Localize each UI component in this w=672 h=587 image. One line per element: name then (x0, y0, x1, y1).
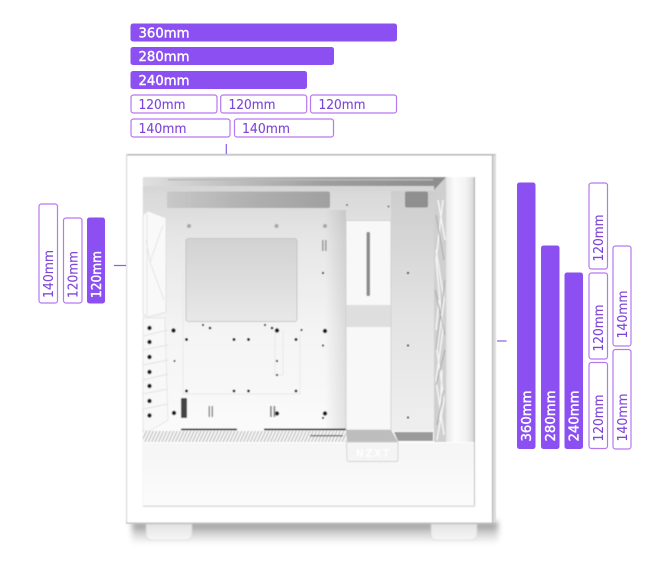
cable cover (346, 220, 391, 430)
box: 140mm fan 2: 140mm (242, 122, 290, 137)
top vent slot (167, 192, 330, 208)
box: 120mm fan 3: 120mm (318, 98, 366, 113)
box: 140mm rear fan: 140mm (42, 250, 57, 298)
case shadow (132, 522, 498, 544)
bar: 360mm radiator (130, 24, 397, 42)
bar: 280mm front radiator: 280mm (544, 390, 559, 442)
bar: 360mm front radiator: 360mm (520, 390, 535, 442)
rear fan options (39, 204, 105, 304)
box: 120mm fan 3 (310, 95, 396, 113)
mesh front intake (434, 177, 446, 442)
bar: 280mm radiator: 280mm (138, 50, 190, 65)
left fan (143, 211, 166, 317)
box: 120mm front fan middle (589, 273, 608, 359)
small top vent (405, 192, 428, 208)
pc case (126, 154, 496, 540)
box: 120mm rear fan: 120mm (66, 251, 82, 298)
top band (143, 177, 446, 191)
connector tick: right (497, 340, 506, 342)
cable slots (181, 240, 346, 430)
right bay (391, 190, 434, 431)
connector tick: left (114, 264, 126, 266)
front pillar (446, 177, 475, 442)
box: 140mm front fan top (613, 246, 631, 346)
bar: 280mm radiator (130, 47, 334, 65)
box: 120mm fan 1: 120mm (138, 98, 186, 113)
motherboard cutout (186, 238, 297, 322)
connector tick: top (225, 144, 227, 154)
right floor recess (394, 432, 433, 441)
bottom grille (143, 431, 346, 442)
bar: 240mm front radiator: 240mm (568, 390, 582, 442)
case frame (126, 154, 496, 524)
bar: 360mm front radiator (517, 182, 536, 449)
motherboard tray outline (183, 235, 300, 394)
box: 120mm front fan bottom: 120mm (592, 394, 607, 442)
top radiator and fan options (130, 24, 397, 137)
psu shroud (143, 442, 475, 507)
box: 120mm fan 1 (131, 95, 217, 113)
front radiator and fan options (517, 182, 631, 449)
back panel (143, 190, 434, 442)
box: 120mm fan 2: 120mm (228, 98, 276, 113)
grille handle (310, 435, 343, 436)
bar: 280mm front radiator (541, 246, 560, 449)
bar: 360mm radiator: 360mm (138, 26, 190, 41)
bar: 120mm rear radiator: 120mm (90, 251, 105, 298)
nzxt badge (346, 442, 398, 462)
box: 140mm front fan top: 140mm (616, 290, 631, 338)
foot right (431, 524, 477, 540)
box: 120mm fan 2 (221, 95, 307, 113)
box: 140mm fan 1: 140mm (138, 122, 186, 137)
bar: 240mm radiator (130, 71, 307, 89)
bar: 240mm radiator: 240mm (138, 74, 190, 89)
mounting holes (171, 204, 409, 419)
box: 140mm front fan bottom: 140mm (616, 394, 631, 442)
box: 140mm fan 1 (131, 119, 230, 137)
box: 140mm front fan bottom (613, 350, 631, 449)
box: 120mm front fan middle: 120mm (592, 304, 607, 352)
window interior (142, 177, 475, 507)
nzxt badge: NZXT (356, 448, 391, 460)
box: 140mm fan 2 (234, 119, 334, 137)
badge ramp (346, 430, 398, 442)
expansion brackets (143, 318, 168, 431)
shadow beside cable cover (325, 210, 346, 430)
box: 120mm front fan bottom (589, 362, 608, 448)
box: 120mm front fan top (589, 183, 608, 269)
bar: 240mm front radiator (564, 272, 583, 449)
foot left (146, 524, 192, 540)
box: 120mm front fan top: 120mm (592, 214, 607, 262)
